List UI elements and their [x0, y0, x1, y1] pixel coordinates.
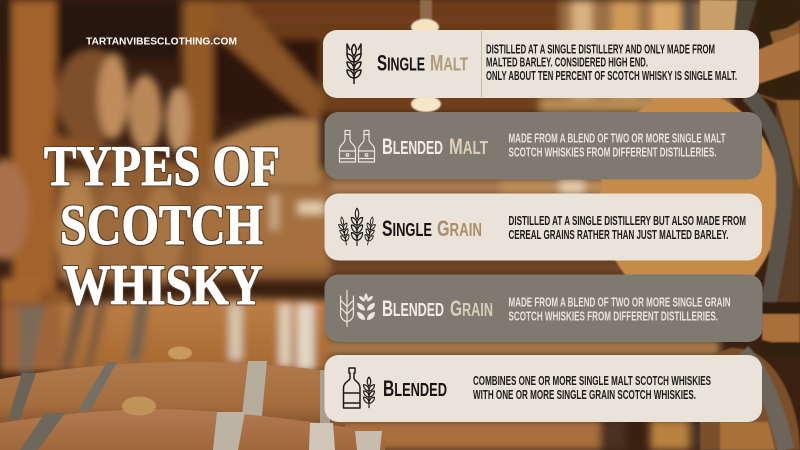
heading: single grain: [382, 216, 482, 241]
panel: single grain: [324, 194, 762, 260]
panel: blended grain: [324, 274, 762, 342]
description: single malt: [486, 41, 737, 83]
heading: blended grain: GRAIN: [450, 296, 493, 321]
foreground barrel lower: [0, 396, 385, 450]
website label: TARTANVIBESCLOTHING.COM: [86, 36, 237, 48]
heading: blended: BLENDED: [383, 376, 447, 401]
upper shelf barrels: [56, 50, 128, 144]
description: single grain: [508, 213, 746, 242]
icon: two bottles: [340, 130, 374, 162]
heading: single malt: MALT: [430, 51, 468, 76]
panel: single malt: [323, 30, 759, 98]
title: SCOTCH: [60, 194, 263, 257]
floor and lower backdrop: [330, 420, 610, 450]
middle barrels: [58, 168, 330, 280]
heading: single malt: SINGLE: [377, 51, 425, 76]
heading: blended malt: MALT: [449, 134, 489, 159]
heading: single grain: SINGLE: [382, 216, 432, 241]
foreground right-hand barrels and beams: [600, 0, 800, 450]
foreground barrel with bung: [0, 346, 345, 440]
description: blended: [473, 373, 711, 402]
icon: outline wheat and filled wheat: [341, 290, 375, 327]
heading: blended malt: BLENDED: [382, 134, 443, 159]
icon: bottle and wheat: [344, 368, 374, 408]
description: blended malt: [508, 131, 726, 160]
title: [44, 135, 280, 317]
heading: single grain: GRAIN: [437, 216, 482, 241]
ceiling beams and posts: [205, 0, 325, 125]
panel: blended: [324, 355, 762, 422]
lamp glows: [411, 0, 441, 112]
title: WHISKY: [63, 254, 263, 317]
long barrel row: [0, 298, 330, 372]
icon: wheat: [347, 44, 361, 84]
description: blended grain: [508, 295, 730, 324]
icon: three wheat stalks: [337, 208, 377, 246]
description: single malt: MALTED BARLEY. CONSIDERED HIGH END.: [486, 55, 648, 70]
panel: blended malt: [324, 112, 762, 180]
title: TYPES OF: [44, 135, 280, 198]
heading: blended grain: BLENDED: [382, 296, 444, 321]
